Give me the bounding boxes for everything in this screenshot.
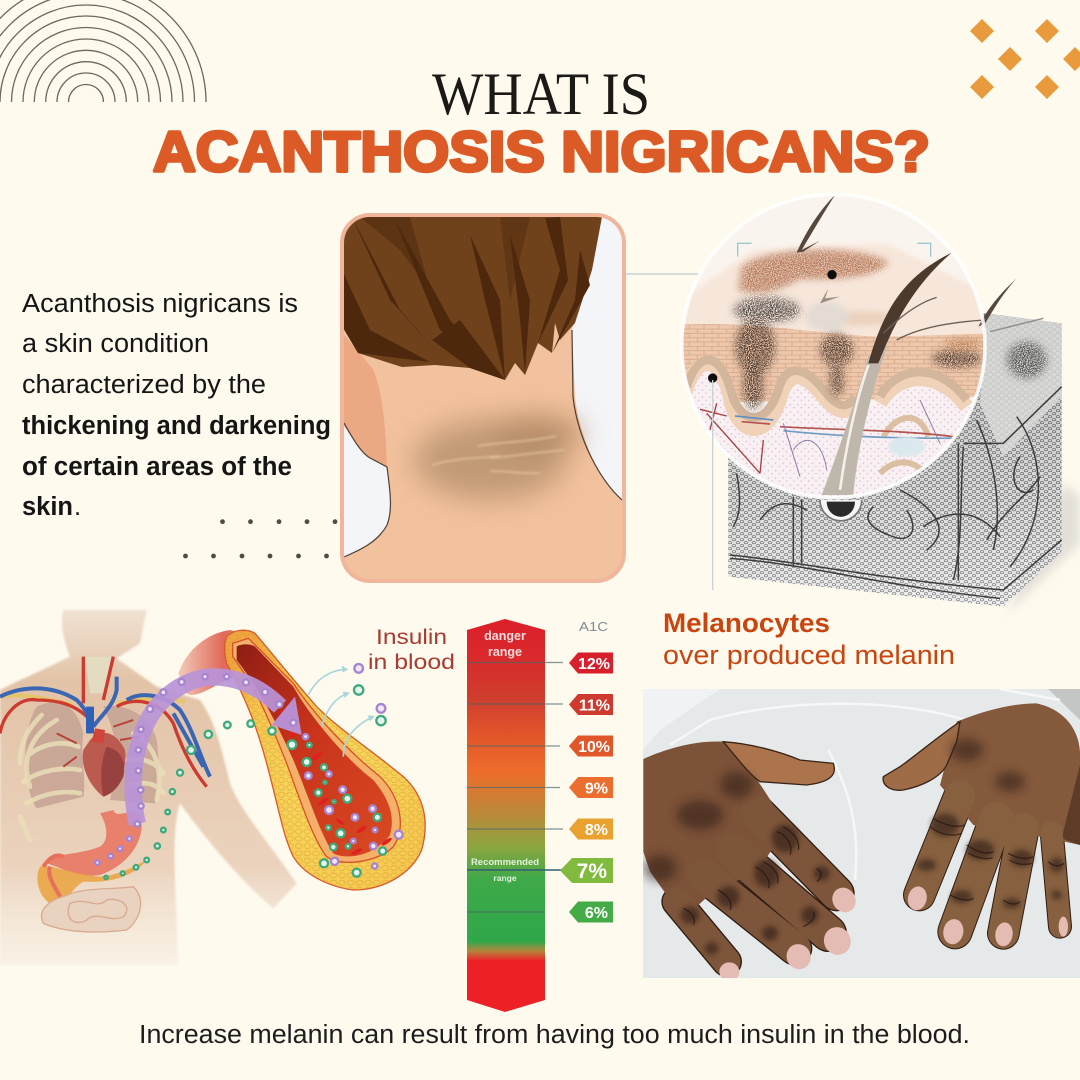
gauge labels: range <box>488 645 522 659</box>
knuckle wrinkles <box>683 818 1064 927</box>
fatty tissue wall <box>225 630 425 890</box>
gauge labels <box>471 629 539 883</box>
neck trachea <box>85 657 112 693</box>
gauge labels: Recommended <box>471 857 539 868</box>
text block: definition: characterized by the <box>22 371 266 399</box>
footer sentence: Increase melanin can result from having too much insulin in the blood. <box>139 1021 970 1049</box>
gauge labels: range <box>493 873 517 883</box>
tag 12%: 12% <box>578 656 610 673</box>
skin cube <box>728 313 1080 613</box>
vessel stump <box>178 630 253 695</box>
intestine <box>42 887 141 932</box>
heart <box>83 728 125 797</box>
lungs <box>25 702 159 808</box>
gauge labels: danger <box>484 629 526 643</box>
caption: melanocytes: over produced melanin <box>663 640 955 670</box>
brown speckled patch <box>740 250 887 293</box>
torso <box>0 610 297 965</box>
green glucose dots <box>104 685 386 879</box>
stomach <box>47 810 142 876</box>
lumen with blood <box>237 644 392 856</box>
red blood cells <box>279 709 393 856</box>
lens ring <box>682 194 985 498</box>
neck darkening patch <box>414 416 581 500</box>
tag 7% <box>560 858 613 883</box>
dermis <box>690 370 970 496</box>
title: WHAT IS <box>432 61 650 127</box>
epidermis <box>677 324 993 403</box>
right hand fingers <box>919 795 1060 933</box>
right hand back and wrist <box>940 703 1080 845</box>
left hand outline <box>677 812 837 962</box>
ear side shading <box>344 335 387 466</box>
gauge bar <box>467 619 545 1012</box>
tag 9%: 9% <box>585 780 608 798</box>
text block: definition: skin <box>22 493 73 521</box>
neck contour lines <box>344 330 622 557</box>
tag 6%: 6% <box>585 905 608 922</box>
blue release arrows <box>308 669 372 757</box>
purple insulin arrow <box>133 677 302 824</box>
basal wave layer <box>685 360 967 477</box>
photo: hands with darkened knuckles <box>643 689 1080 981</box>
towel <box>643 689 1080 978</box>
background behind neck, right <box>572 215 626 502</box>
text block: definition: of certain areas of the <box>22 453 292 481</box>
clavicle <box>0 695 185 705</box>
magnifier lens <box>677 190 1043 503</box>
tag 10% <box>569 736 613 756</box>
connector line from neck to lens <box>624 273 832 275</box>
tag 8%: 8% <box>585 822 608 839</box>
tag 9% <box>569 777 613 798</box>
knuckle darkening <box>681 814 1064 954</box>
text block: definition: . <box>74 493 81 521</box>
right thumb <box>883 722 960 790</box>
skin crease lines <box>432 436 565 473</box>
dorsal darkening <box>643 739 1025 882</box>
hair strands <box>342 217 590 380</box>
tag 12% <box>569 652 613 674</box>
hair <box>868 253 952 363</box>
ribs <box>20 715 163 840</box>
text block: definition: thickening and darkening <box>22 412 331 440</box>
sweat gland <box>888 437 925 457</box>
title <box>153 61 930 184</box>
decorative dots <box>183 519 337 558</box>
tag 11%: 11% <box>579 698 610 714</box>
A1C heading: A1C <box>579 619 608 634</box>
vessel cross-section <box>178 630 425 890</box>
tag 6% <box>569 902 613 922</box>
left thumb <box>723 742 834 785</box>
decorative orange diamonds <box>970 19 1080 99</box>
tag 11% <box>569 694 613 715</box>
left hand back <box>643 742 774 906</box>
hair shaft root <box>822 347 887 495</box>
blood vessels <box>700 400 953 477</box>
text block: definition: Acanthosis nigricans is <box>22 290 298 318</box>
tag 7%: 7% <box>577 860 607 883</box>
melanin deposits <box>733 297 982 410</box>
hairs outside lens <box>797 195 1017 327</box>
text block: definition: a skin condition <box>22 330 209 358</box>
caption: melanocytes: Melanocytes <box>663 608 830 638</box>
illustration: body and insulin in blood vessel <box>0 610 425 965</box>
marker dots <box>708 270 837 383</box>
connector line to Melanocytes label <box>711 380 715 590</box>
focus brackets <box>738 243 931 257</box>
pancreas <box>37 860 147 905</box>
hair follicle base <box>820 500 862 521</box>
blood vessels <box>0 657 210 787</box>
arrowheads <box>342 666 375 721</box>
caption: melanocytes <box>663 608 955 670</box>
panel: skin cross-section diagram <box>677 190 1080 613</box>
text block: definition <box>22 290 331 521</box>
hair <box>342 217 602 380</box>
inner wall <box>233 638 400 862</box>
left hand fingers <box>677 812 837 962</box>
scale lines <box>467 662 563 912</box>
fingernails <box>719 883 1068 981</box>
label: insulin in blood <box>368 626 455 674</box>
tag 8% <box>569 818 613 840</box>
upper pale skin layers <box>685 243 982 336</box>
chart: A1C gauge <box>467 619 613 1012</box>
purple insulin dots <box>95 664 403 869</box>
tag 10%: 10% <box>578 739 610 756</box>
label: insulin in blood: in blood <box>368 651 455 674</box>
label: insulin in blood: Insulin <box>376 626 447 649</box>
title: ACANTHOSIS NIGRICANS? <box>153 120 930 184</box>
panel: neck illustration <box>340 215 626 581</box>
decorative concentric arcs <box>0 0 206 102</box>
right hand outline <box>919 795 1060 933</box>
